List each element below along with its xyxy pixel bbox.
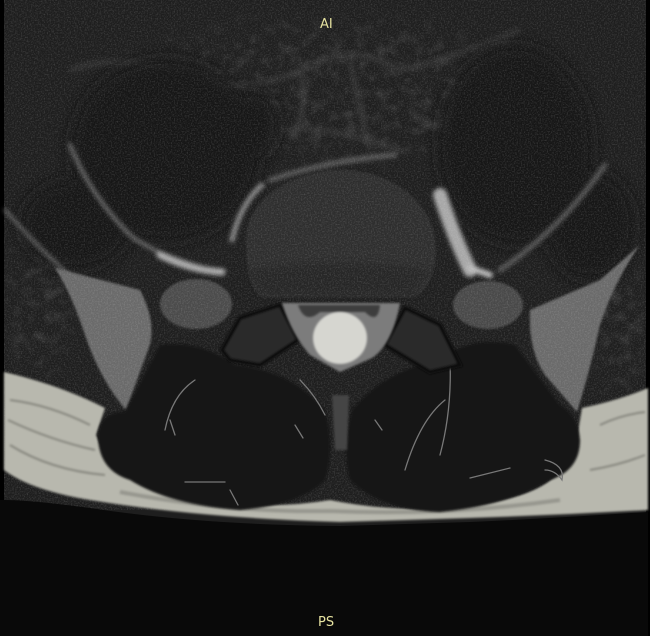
label: posterior: PS bbox=[318, 615, 334, 630]
right lateral muscle bbox=[530, 245, 640, 412]
bottom dark area bbox=[0, 500, 648, 636]
gray lateral muscles bbox=[55, 245, 640, 412]
fat band shading bbox=[8, 400, 645, 512]
psoas and abdominal dark regions bbox=[20, 45, 635, 280]
left paraspinal muscle bbox=[98, 344, 330, 510]
abdominal tissue texture bbox=[70, 30, 520, 150]
left lateral muscle bbox=[55, 268, 152, 410]
mottled soft tissue bbox=[9, 24, 644, 385]
thecal sac bbox=[313, 312, 367, 364]
label: anterior: AI bbox=[320, 17, 333, 32]
left transverse muscle bbox=[160, 279, 232, 329]
bright fat streaks around the psoas bbox=[5, 145, 605, 285]
muscle fascia lines bbox=[165, 360, 562, 505]
spinal canal fat bbox=[282, 303, 400, 372]
right transverse muscle bbox=[453, 281, 523, 329]
vertebral body bbox=[246, 170, 436, 297]
paraspinal muscles bbox=[98, 342, 580, 512]
facet joints and posterior elements bbox=[222, 305, 460, 372]
central spinous process bbox=[332, 395, 349, 450]
subcutaneous fat band bbox=[4, 372, 648, 522]
left facet joint bbox=[222, 305, 298, 365]
vertebral body lower band bbox=[248, 262, 432, 296]
image noise bbox=[4, 0, 646, 510]
canal dark lining bbox=[298, 305, 380, 317]
right facet joint bbox=[385, 308, 460, 372]
right paraspinal muscle bbox=[346, 342, 580, 512]
